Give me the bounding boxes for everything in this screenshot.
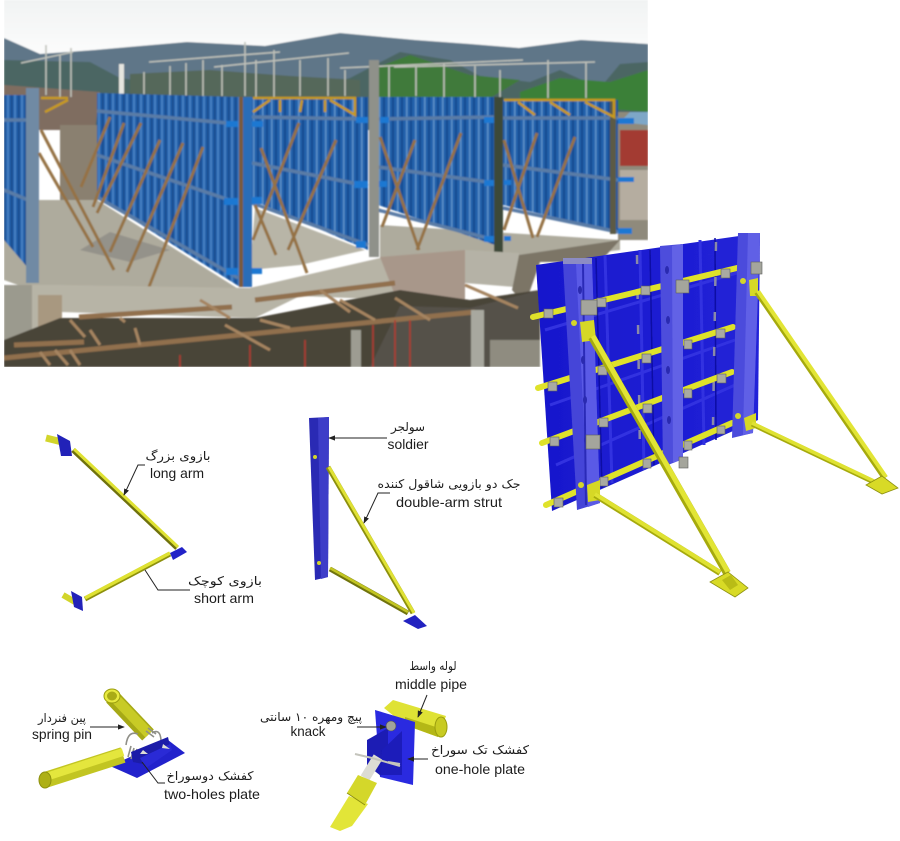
panel ribs [545, 240, 740, 483]
label: middle pipe: لوله واسط [410, 659, 456, 674]
strut short tube [330, 569, 408, 613]
strut: front short brace [595, 495, 720, 573]
strut: rear long brace [757, 292, 885, 478]
photo under-slab darkness [4, 290, 540, 367]
photo wall soldiers [241, 97, 252, 287]
label: two-holes plate: two-holes plate [164, 786, 260, 802]
label: two-holes plate [142, 762, 260, 802]
spring pin coils [126, 728, 161, 760]
blue flanges [367, 728, 388, 776]
photo wall 1 [97, 93, 240, 287]
photo concrete slab edge [30, 258, 400, 335]
component: arm assembly [46, 434, 187, 611]
panel soldier 3 [732, 233, 760, 438]
photo wall 3 [378, 97, 495, 245]
label: middle pipe: middle pipe [395, 676, 467, 692]
base blue plate [170, 547, 187, 560]
label: one-hole plate: کفشک تک سوراخ [431, 743, 529, 758]
label: double-arm strut: double-arm strut [396, 494, 502, 510]
photo trees [4, 52, 648, 130]
photo concrete block [465, 250, 519, 287]
long arm tube [73, 450, 177, 548]
label: spring pin: پین فنردار [37, 711, 86, 726]
photo mountains [4, 33, 648, 130]
label: double-arm strut: جک دو بازویی شاقول کننده [378, 477, 520, 492]
silver shaft [365, 757, 378, 778]
pin ends [140, 744, 170, 754]
label: one-hole plate [408, 743, 529, 777]
strut: front long brace [592, 337, 727, 573]
left red-brown haze [4, 85, 100, 130]
photo: formwork on construction site [4, 0, 648, 367]
knack bolt [386, 721, 396, 731]
top blue plate [57, 434, 72, 456]
label: soldier: سولجر [390, 420, 425, 435]
upper pipe [112, 697, 148, 735]
photo wall left [4, 95, 28, 268]
photo white pole [119, 64, 124, 94]
label: one-hole plate: one-hole plate [435, 761, 525, 777]
panel yellow brackets [580, 278, 758, 502]
strut long tube [328, 467, 413, 613]
label: short arm: short arm [194, 590, 254, 606]
photo left column [4, 285, 32, 345]
label: short arm: بازوی کوچک [188, 574, 262, 589]
strut: front base plate [710, 572, 748, 597]
photo sky [4, 0, 648, 62]
lower pipe collar [347, 775, 377, 805]
lower pipe tail [330, 796, 368, 831]
photo shoring props [180, 320, 410, 367]
label: middle pipe [395, 659, 467, 717]
photo waler end clamps [224, 117, 634, 275]
3D formwork panel [533, 233, 898, 597]
panel soldier 2 [660, 244, 683, 467]
bottom blue plate [71, 591, 83, 611]
component: two-holes plate detail [39, 689, 185, 788]
photo background ground [4, 200, 620, 300]
panel pipe clamps [544, 269, 730, 507]
photo wall 2 [252, 97, 368, 250]
panel upper clamps on soldiers [581, 262, 762, 468]
photo right background [618, 112, 648, 240]
component: one-hole plate detail [330, 700, 447, 831]
label: short arm [145, 570, 262, 606]
panel soldier 1 [563, 258, 600, 510]
photo diagonal struts [39, 117, 575, 287]
label: knack: پیچ ومهره ۱۰ سانتی [260, 710, 362, 725]
panel horizontal pipes [533, 268, 737, 505]
blue flanges [131, 737, 170, 764]
label: long arm: بازوی بزرگ [146, 449, 210, 464]
label: soldier [329, 420, 429, 452]
label: two-holes plate: کفشک دوسوراخ [166, 769, 254, 784]
label: spring pin [32, 711, 124, 742]
panel tie-hole strips [637, 242, 716, 455]
photo wall 4 [503, 100, 618, 232]
top pipe stub [46, 438, 62, 442]
panel face [536, 233, 760, 511]
short arm tube [85, 554, 170, 599]
label: spring pin: spring pin [32, 726, 92, 742]
label: double-arm strut [364, 477, 520, 523]
blue plate [375, 710, 415, 785]
label: knack: knack [290, 723, 326, 739]
label: long arm [124, 449, 210, 495]
photo yellow top brackets [41, 98, 614, 117]
label: long arm: long arm [150, 465, 204, 481]
photo concrete column [471, 310, 484, 367]
pin [355, 754, 400, 766]
lower pipe [45, 755, 123, 780]
strut: rear short brace [752, 424, 878, 484]
label: knack [260, 710, 386, 739]
photo formwork box [380, 250, 465, 308]
photo timber joists [4, 283, 475, 358]
label: soldier: soldier [388, 436, 429, 452]
photo scaffold poles [21, 42, 595, 98]
blue base plate [110, 740, 185, 778]
component: soldier with strut [309, 417, 427, 629]
soldier column [309, 417, 329, 580]
bottom pipe stub [63, 595, 75, 602]
photo wall waler beams [4, 111, 618, 278]
middle pipe [384, 700, 446, 737]
strut: rear base plate [866, 476, 898, 494]
strut base plate [403, 615, 427, 629]
